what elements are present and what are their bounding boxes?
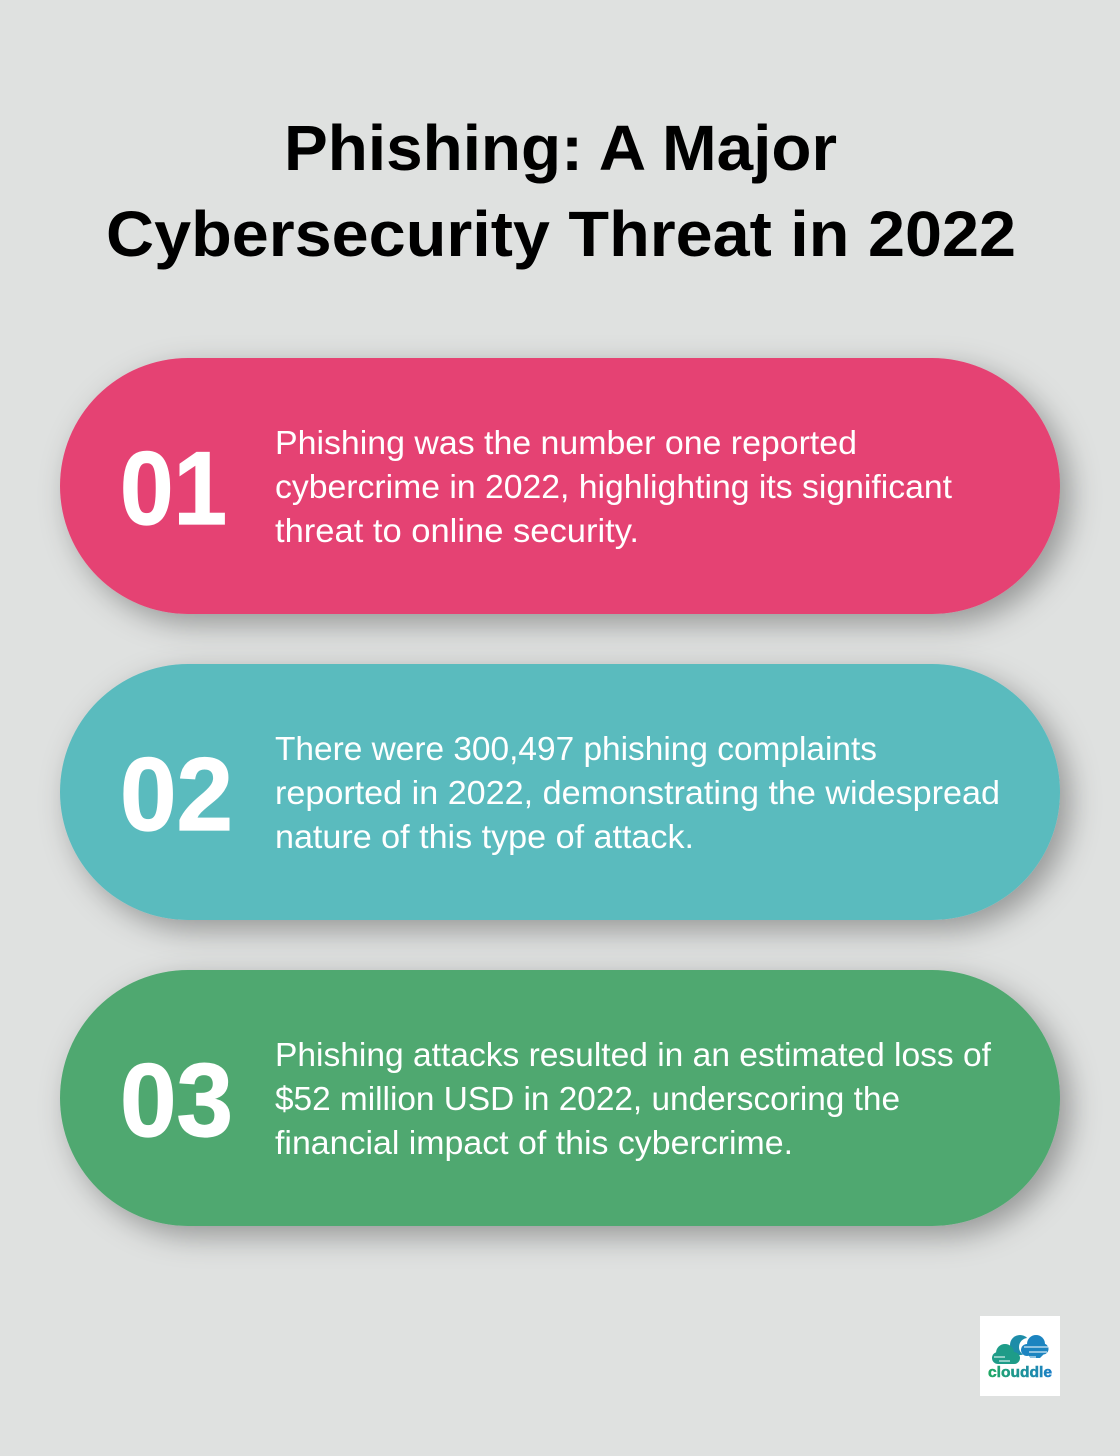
text block 03: $52 million USD in 2022, underscoring the — [275, 1080, 900, 1117]
text block 03 — [275, 1036, 992, 1161]
panel: card 02 — [60, 664, 1060, 920]
title — [106, 112, 1016, 270]
logo: clouddle — [980, 1316, 1060, 1396]
text block 01: cybercrime in 2022, highlighting its significant — [275, 468, 952, 505]
title: Phishing: A Major — [284, 112, 837, 184]
text block 02: nature of this type of attack. — [275, 818, 694, 855]
text block 01: threat to online security. — [275, 512, 639, 549]
number 01: 01 — [120, 431, 227, 547]
text block 01 — [275, 424, 952, 549]
text block 02: There were 300,497 phishing complaints — [275, 730, 877, 767]
panel: card 03 — [60, 970, 1060, 1226]
icon: clouds — [992, 1335, 1048, 1364]
panel: card 01 — [60, 358, 1060, 614]
text block 01: Phishing was the number one reported — [275, 424, 857, 461]
text block 03: Phishing attacks resulted in an estimated loss of — [275, 1036, 992, 1073]
number 03: 03 — [120, 1043, 233, 1159]
text block 02: reported in 2022, demonstrating the widespread — [275, 774, 1000, 811]
title: Cybersecurity Threat in 2022 — [106, 198, 1016, 270]
text block 03: financial impact of this cybercrime. — [275, 1124, 793, 1161]
number 02: 02 — [120, 737, 233, 853]
text block 02 — [275, 730, 1000, 855]
logo wordmark: clouddle — [988, 1364, 1052, 1381]
